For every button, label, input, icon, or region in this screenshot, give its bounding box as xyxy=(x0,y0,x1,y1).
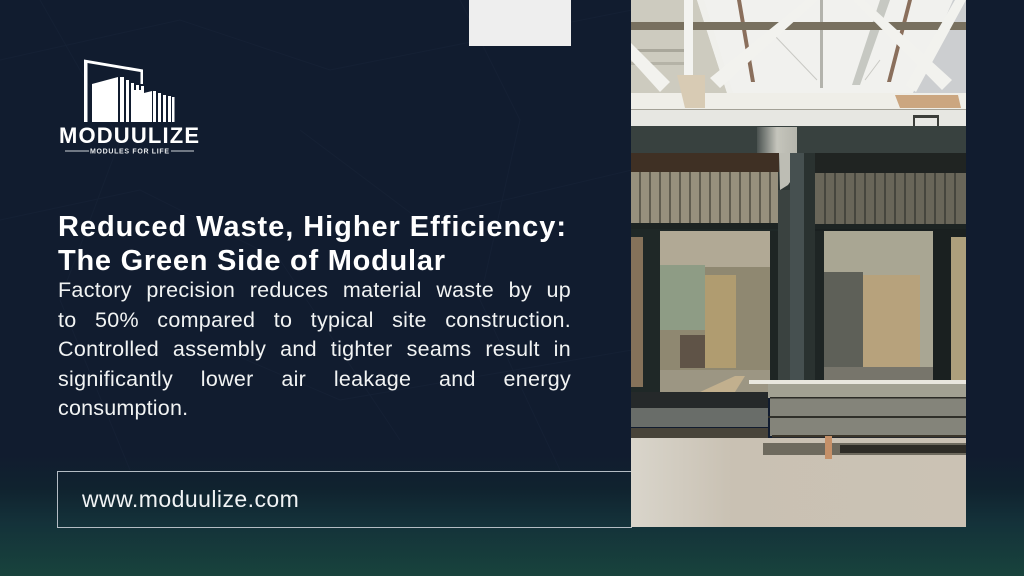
white square accent xyxy=(469,0,571,46)
body paragraph: significantly lower air leakage and energy xyxy=(58,366,571,390)
website url: www.moduulize.com xyxy=(82,486,299,512)
body paragraph xyxy=(58,278,571,420)
heading: The Green Side of Modular xyxy=(58,245,445,277)
left windows xyxy=(631,229,778,396)
website box xyxy=(57,471,632,528)
logo icon: modular building xyxy=(84,60,174,122)
left bay: soffit and slats xyxy=(631,153,779,230)
floor xyxy=(631,438,966,527)
background paper texture xyxy=(0,0,632,470)
logo xyxy=(59,60,199,156)
body paragraph: Controlled assembly and tighter seams result in xyxy=(58,337,571,361)
body paragraph: consumption. xyxy=(58,396,188,420)
wall base step xyxy=(631,392,768,438)
stacked timber xyxy=(749,380,966,459)
body paragraph: Factory precision reduces material waste by up xyxy=(58,278,571,302)
central pillar xyxy=(770,153,824,391)
right bay: soffit and slats xyxy=(815,153,966,231)
logo tagline: MODULES FOR LIFE xyxy=(90,148,169,156)
heading: Reduced Waste, Higher Efficiency: xyxy=(58,211,566,243)
dark cladding wall xyxy=(631,126,966,396)
right windows xyxy=(815,229,966,381)
logo wordmark: MODUULIZE xyxy=(59,123,199,148)
photo: modular building interior with stacked timber xyxy=(631,0,966,527)
ceiling xyxy=(631,0,966,127)
logo tagline xyxy=(65,148,194,156)
body paragraph: to 50% compared to typical site construction. xyxy=(58,308,571,332)
heading xyxy=(58,211,566,277)
